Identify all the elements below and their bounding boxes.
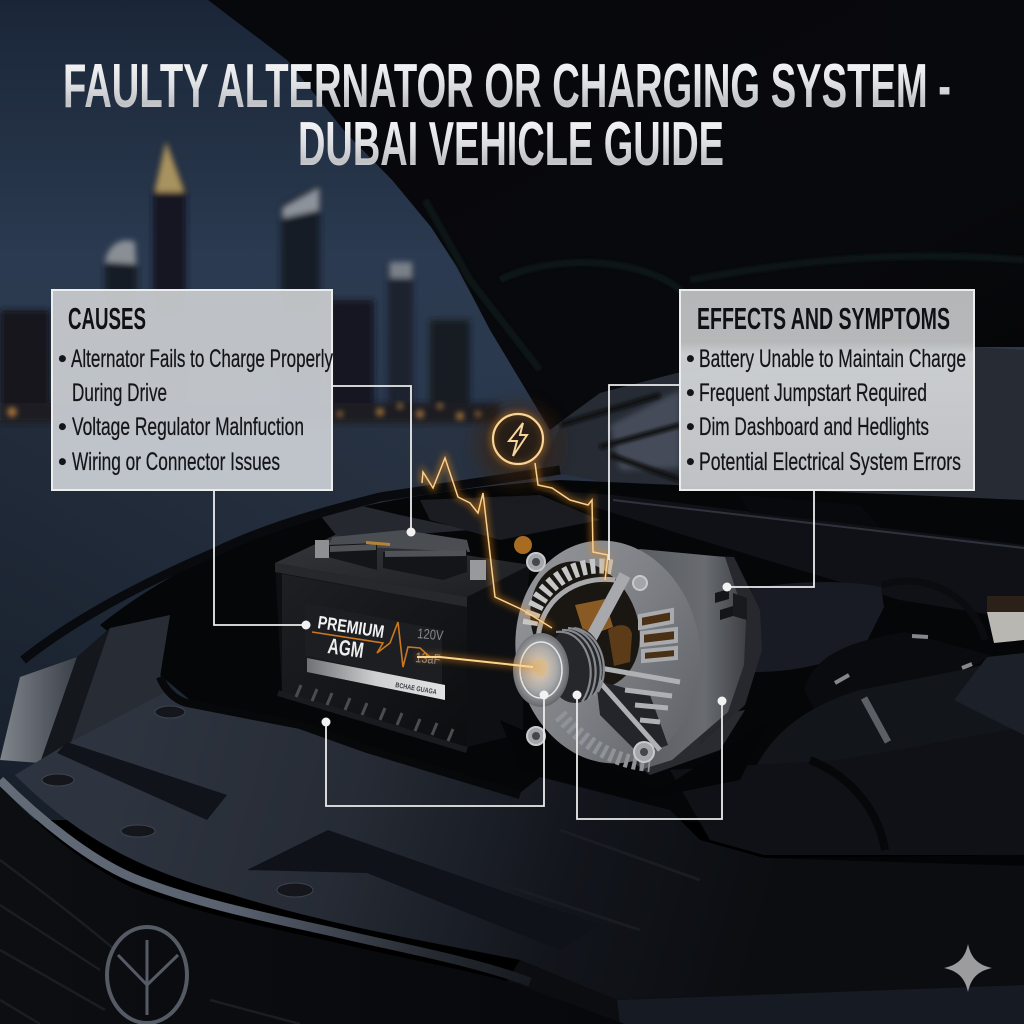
icon: sparkle watermark — [944, 944, 992, 992]
battery front face — [282, 574, 467, 747]
battery caps — [328, 543, 377, 570]
inner fender panel — [63, 615, 187, 760]
energy arcs and bolt icon — [417, 403, 608, 691]
battery top face — [275, 535, 530, 597]
arc glow — [417, 414, 608, 667]
rear windings — [677, 590, 692, 700]
label: voltage: 120V — [417, 625, 445, 643]
silver strip — [307, 658, 445, 700]
frame vent slats — [640, 610, 676, 661]
dark rail — [700, 840, 1024, 870]
hose — [882, 581, 985, 640]
causes list: • — [58, 345, 67, 373]
effects list — [686, 345, 966, 476]
label: AGM: AGM — [326, 633, 365, 663]
battery top edge — [275, 563, 467, 607]
pulley grooves — [547, 627, 604, 703]
causes list: Wiring or Connector Issues — [72, 448, 280, 476]
background: blurred Dubai skyline — [0, 140, 500, 423]
background: water — [0, 420, 700, 820]
headlight glass — [0, 657, 77, 763]
strip text: BCHAE GUAGA — [395, 682, 437, 696]
panel: causes — [52, 290, 333, 490]
upper facet — [954, 653, 1024, 735]
bay seal — [160, 677, 520, 795]
panel: effects and symptoms — [680, 290, 974, 490]
connector dots — [302, 528, 732, 726]
recess: center — [247, 830, 600, 950]
rear housing — [610, 549, 746, 770]
intake pipe — [757, 653, 1024, 765]
effects list: • — [686, 379, 695, 407]
hood inner structure — [425, 200, 1024, 370]
title — [63, 52, 951, 179]
battery feet — [278, 693, 467, 750]
causes list: • — [58, 413, 67, 441]
right lightning arc — [535, 463, 608, 580]
bumper highlight band — [0, 780, 530, 982]
toyota emblem — [107, 927, 187, 1023]
front frame — [498, 526, 718, 778]
rear vents — [715, 589, 733, 620]
label: amps: 13aF — [415, 649, 441, 667]
lower ribs — [598, 668, 680, 750]
recess: left — [57, 742, 227, 820]
lower fins — [560, 715, 650, 765]
pulley hot glow — [511, 643, 559, 691]
open hood underside — [208, 0, 1024, 430]
pulley energy beam — [417, 657, 533, 667]
windshield highlight — [610, 390, 680, 470]
front shell — [0, 785, 625, 1024]
air duct — [670, 727, 1024, 855]
fan ring — [530, 566, 612, 625]
engine cover — [745, 582, 884, 672]
cable bundle — [804, 632, 990, 720]
causes list — [58, 345, 333, 476]
panel heading: causes: CAUSES — [68, 301, 146, 336]
pulley face — [513, 633, 569, 707]
causes list: Voltage Regulator Malnfuction — [72, 413, 304, 441]
spoke diagonal — [590, 575, 625, 640]
front top panel — [15, 690, 1024, 1000]
effects list: • — [686, 345, 695, 373]
background: dusk sky — [0, 0, 1024, 430]
battery body — [275, 535, 530, 747]
effects list: • — [686, 448, 695, 476]
right windshield glimpse — [540, 347, 1024, 500]
mounting ears — [527, 553, 654, 762]
heartbeat trace — [312, 622, 430, 667]
headlight strut — [40, 628, 110, 763]
battery — [275, 530, 532, 750]
hose clamp — [864, 698, 888, 742]
mount bracket — [630, 710, 745, 775]
lower dark band — [617, 985, 1024, 1024]
panel bolts — [42, 706, 313, 897]
coolant reservoir — [987, 612, 1024, 643]
bolt icon — [493, 414, 543, 464]
wipers — [560, 395, 680, 480]
left lightning arc — [422, 458, 552, 628]
rear ring — [690, 555, 762, 745]
shadow under alternator — [500, 720, 770, 800]
background: city lights — [7, 403, 481, 420]
effects list: Dim Dashboard and Hedlights — [699, 413, 929, 441]
cowl — [540, 490, 1024, 620]
fender edge — [23, 470, 560, 660]
lower dark cavity — [596, 680, 668, 755]
fan opening — [510, 543, 660, 707]
label panel — [305, 603, 442, 688]
engine bay — [100, 480, 1024, 870]
top plate — [328, 530, 470, 552]
copper windings — [575, 599, 613, 637]
causes list: During Drive — [72, 379, 167, 407]
terminals — [315, 540, 329, 558]
alternator — [498, 526, 770, 800]
bay items behind battery — [316, 505, 470, 540]
label: premium: PREMIUM — [316, 612, 386, 642]
grille slats — [0, 860, 300, 1024]
connector lines — [214, 385, 814, 819]
effects list: Frequent Jumpstart Required — [699, 379, 927, 407]
recess lines right — [504, 830, 700, 930]
causes list: • — [58, 448, 67, 476]
title: DUBAI VEHICLE GUIDE — [298, 110, 724, 179]
effects list: • — [686, 413, 695, 441]
dark halo behind bolt — [476, 403, 560, 487]
causes list: Alternator Fails to Charge Properly — [71, 345, 333, 373]
cowl vent — [740, 495, 880, 527]
